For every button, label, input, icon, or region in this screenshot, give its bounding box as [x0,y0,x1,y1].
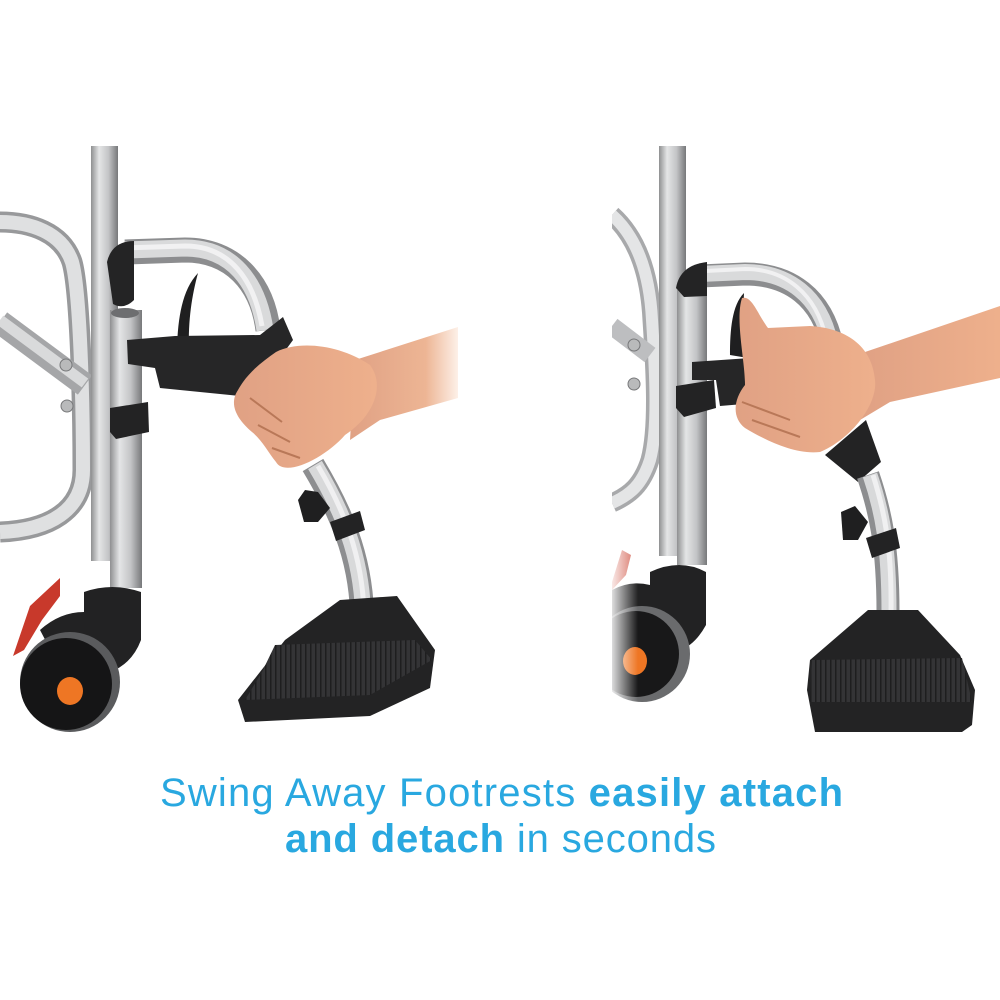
knob [298,490,330,522]
footrest tube lower [313,465,362,612]
footrest tube upper [125,250,268,330]
release lever [730,293,744,358]
footrest tube lower [868,475,888,612]
hand and forearm [234,327,458,468]
hand and forearm [736,298,1000,452]
footrest top cap [107,241,134,306]
caption line 2: and detach in seconds [285,817,716,861]
tube collar [866,528,900,558]
knob [841,506,868,540]
release lever [177,273,198,350]
tube clamp [676,380,716,417]
footrest top cap [676,262,707,297]
socket tube [677,290,707,565]
footplate [807,610,975,732]
frame bolts [628,339,640,390]
panel: footrest swinging, right photo [593,146,1000,732]
brake lever [13,578,60,656]
caster wheel [20,632,120,732]
caster fork [612,565,706,650]
fade over caster left edge [612,550,638,705]
brake lever [612,550,631,590]
vertical pole [91,146,118,561]
seat frame loop [612,215,656,503]
caster wheel [612,606,690,702]
caster fork [40,587,141,672]
rubber grip [825,420,881,482]
seat frame loop [0,222,85,532]
caption [160,771,843,861]
latch bracket [127,317,293,396]
tube clamp [110,402,149,439]
footplate [238,596,435,722]
caption line 1: Swing Away Footrests easily attach [160,771,843,815]
frame bolts [60,359,73,412]
tube collar [330,511,365,541]
footrest tube upper [700,274,832,345]
socket tube [110,310,142,588]
latch bracket [692,358,745,406]
vertical pole [659,146,686,556]
panel: footrest attached, left photo [0,146,458,732]
